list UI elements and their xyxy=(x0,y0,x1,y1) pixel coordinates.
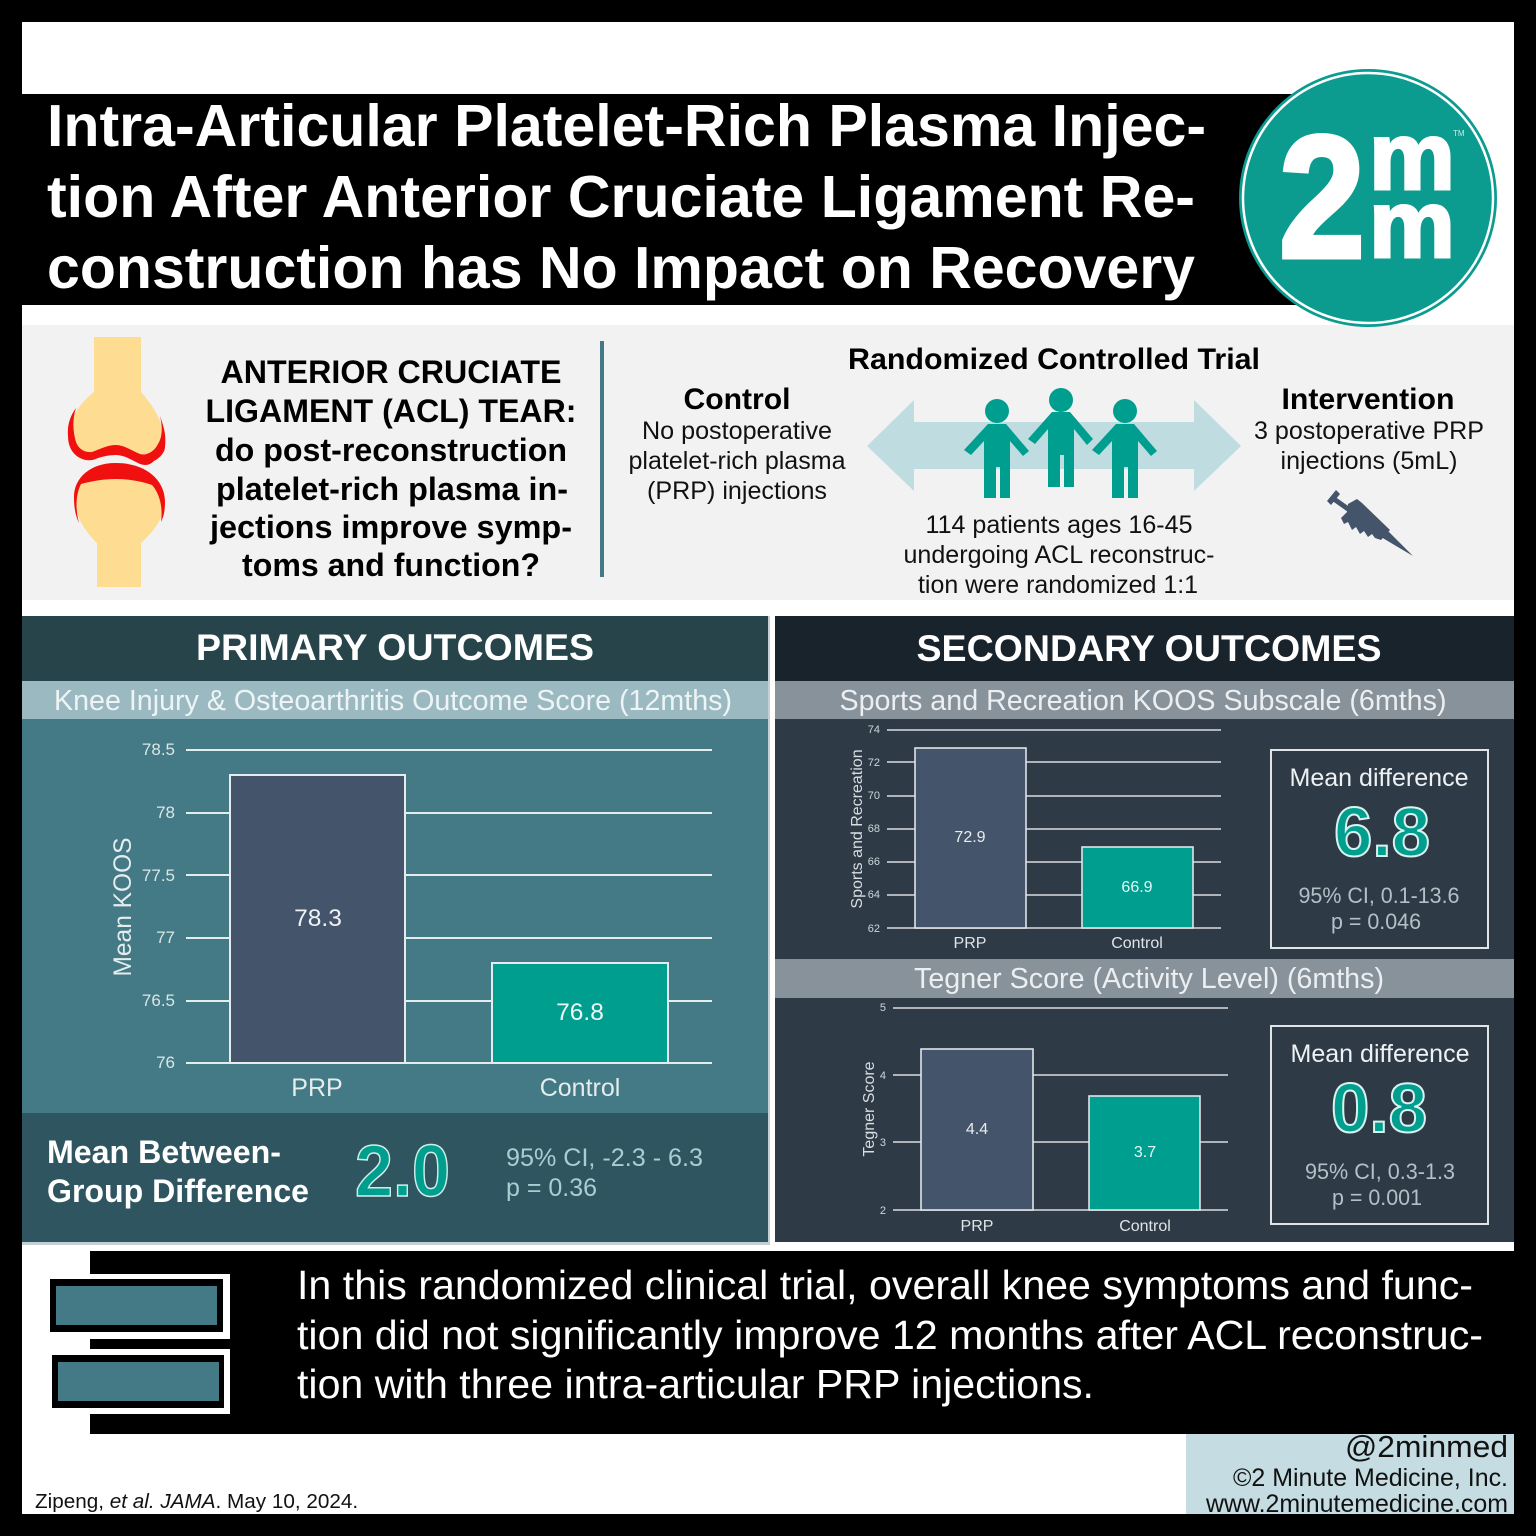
logo: 2 Minute Medicine xyxy=(1239,69,1497,327)
title banner xyxy=(22,93,1312,305)
bar chart: Tegner score: Tegner Score xyxy=(861,1061,878,1157)
bar chart: mean KOOS: 78.3 xyxy=(294,905,342,932)
heading: secondary outcomes: SECONDARY OUTCOMES xyxy=(916,628,1382,669)
logo: 2 Minute Medicine: m xyxy=(1369,171,1455,278)
bar chart: mean KOOS: PRP xyxy=(291,1074,343,1102)
callout: mean between-group difference: Group Difference xyxy=(47,1173,309,1209)
text: clinical question xyxy=(206,354,576,583)
title banner: construction has No Impact on Recovery xyxy=(47,235,1195,301)
subheading: Tegner score xyxy=(775,959,1514,998)
bar chart: Tegner score: PRP xyxy=(961,1218,993,1235)
panel: secondary outcomes xyxy=(775,616,1514,1242)
text: conclusion: In this randomized clinical trial, overall knee symptoms and func- xyxy=(297,1262,1473,1308)
arrow: two-way randomization xyxy=(867,400,1241,491)
callout: Tegner mean difference: 95% CI, 0.3-1.3 xyxy=(1305,1159,1455,1184)
callout: mean between-group difference: 95% CI, -2.3 - 6.3 xyxy=(506,1144,703,1172)
text: patient population: 114 patients ages 16-45 xyxy=(926,511,1192,539)
text: conclusion xyxy=(297,1262,1483,1407)
heading: primary outcomes xyxy=(22,616,768,681)
text: intervention arm: injections (5mL) xyxy=(1280,447,1458,475)
text: clinical question: do post-reconstruction xyxy=(215,432,567,468)
text: intervention arm: Intervention xyxy=(1282,383,1454,416)
bar chart: sports and recreation: Sports and Recreation xyxy=(849,749,866,909)
bar chart: sports and recreation: 68 xyxy=(868,823,880,835)
callout: Tegner mean difference: 0.8 xyxy=(1331,1069,1427,1147)
logo: 2 Minute Medicine: m xyxy=(1369,103,1455,210)
text: intervention arm xyxy=(1254,383,1484,475)
bar chart: Tegner score: 5 xyxy=(880,1002,886,1014)
callout: sports mean difference: p = 0.046 xyxy=(1331,909,1421,934)
panel: credits: www.2minutemedicine.com xyxy=(1205,1490,1508,1518)
callout: mean between-group difference xyxy=(22,1113,768,1242)
bar chart: mean KOOS: 76 xyxy=(156,1053,175,1072)
callout: sports mean difference: 95% CI, 0.1-13.6 xyxy=(1298,883,1460,908)
callout: mean between-group difference: Mean Between- xyxy=(47,1134,281,1170)
bar chart: Tegner score: 3.7 xyxy=(1134,1144,1156,1161)
panel: credits: ©2 Minute Medicine, Inc. xyxy=(1233,1464,1508,1492)
bar chart: sports and recreation: PRP xyxy=(954,935,986,952)
text: clinical question: jections improve symp- xyxy=(209,509,572,545)
callout: Tegner mean difference: p = 0.001 xyxy=(1332,1185,1422,1210)
text: clinical question: ANTERIOR CRUCIATE xyxy=(220,354,562,390)
bar chart: sports and recreation xyxy=(849,724,1221,952)
bar chart: sports and recreation: 72.9 xyxy=(954,829,986,846)
text: intervention arm: 3 postoperative PRP xyxy=(1254,417,1484,445)
bar chart: sports and recreation: 74 xyxy=(868,724,880,736)
bar chart: mean KOOS: 77 xyxy=(156,928,175,947)
text: clinical question: toms and function? xyxy=(242,547,540,583)
panel: background and trial design xyxy=(22,325,1514,600)
text: patient population: undergoing ACL reconstruc- xyxy=(904,541,1214,569)
bar chart: sports and recreation: 72 xyxy=(868,757,880,769)
panel: conclusion banner xyxy=(22,1251,1514,1434)
icon: three patients xyxy=(964,388,1157,498)
subheading: Tegner score: Tegner Score (Activity Level) (6mths) xyxy=(914,963,1384,995)
bar chart: Tegner score: 4 xyxy=(880,1070,886,1082)
bar chart: mean KOOS: 76.5 xyxy=(142,991,175,1010)
icon: knee joint xyxy=(68,337,165,587)
logo: 2 Minute Medicine: 2 xyxy=(1279,99,1365,294)
bar chart: Tegner score: Control xyxy=(1119,1218,1171,1235)
callout: Tegner mean difference: Mean difference xyxy=(1290,1040,1470,1068)
callout: mean between-group difference: p = 0.36 xyxy=(506,1174,597,1202)
panel: credits xyxy=(1186,1429,1514,1518)
heading: primary outcomes: PRIMARY OUTCOMES xyxy=(196,627,594,668)
bar chart: sports and recreation: Control xyxy=(1111,935,1163,952)
logo: 2 Minute Medicine: TM xyxy=(1453,129,1465,138)
text: conclusion: tion did not significantly improve 12 months after ACL reconstruc- xyxy=(297,1312,1483,1358)
text: patient population: tion were randomized 1:1 xyxy=(918,571,1198,599)
subheading: sports and recreation: Sports and Recreation KOOS Subscale (6mths) xyxy=(840,685,1446,717)
callout: mean between-group difference: 2.0 xyxy=(355,1131,450,1212)
callout: sports mean difference: Mean difference xyxy=(1290,764,1468,792)
bar chart: Tegner score: 4.4 xyxy=(966,1121,988,1138)
callout: Tegner mean difference xyxy=(1271,1026,1488,1224)
bar chart: sports and recreation: 64 xyxy=(868,889,880,901)
bar chart: sports and recreation: 62 xyxy=(868,923,880,935)
bar chart: mean KOOS: 77.5 xyxy=(142,866,175,885)
text: control arm: Control xyxy=(684,383,790,416)
bar chart: Tegner score: 2 xyxy=(880,1205,886,1217)
panel: primary outcomes xyxy=(22,616,770,1245)
panel: credits: @2minmed xyxy=(1345,1429,1508,1464)
title banner: Intra-Articular Platelet-Rich Plasma Injec- xyxy=(47,93,1206,159)
bar chart: sports and recreation: 66 xyxy=(868,856,880,868)
heading: randomized controlled trial: Randomized Controlled Trial xyxy=(848,343,1260,376)
text: control arm xyxy=(628,383,846,505)
bar chart: sports and recreation: 70 xyxy=(868,790,880,802)
bar chart: mean KOOS: 76.8 xyxy=(556,999,604,1026)
bar chart: mean KOOS: 78 xyxy=(156,803,175,822)
subheading: KOOS: Knee Injury & Osteoarthritis Outcome Score (12mths) xyxy=(54,685,732,717)
bar chart: Tegner score xyxy=(861,1002,1228,1235)
text: control arm: (PRP) injections xyxy=(647,477,827,505)
bar chart: Tegner score: 3 xyxy=(880,1137,886,1149)
icon: syringe xyxy=(1327,490,1413,556)
text: clinical question: LIGAMENT (ACL) TEAR: xyxy=(206,393,576,429)
bar chart: mean KOOS: Control xyxy=(540,1074,620,1102)
callout: sports mean difference xyxy=(1271,750,1488,948)
text: control arm: No postoperative xyxy=(642,417,832,445)
title banner: tion After Anterior Cruciate Ligament Re- xyxy=(47,164,1195,230)
text: conclusion: tion with three intra-articular PRP injections. xyxy=(297,1361,1094,1407)
text: control arm: platelet-rich plasma xyxy=(628,447,846,475)
text: clinical question: platelet-rich plasma in- xyxy=(216,471,568,507)
text: patient population xyxy=(904,511,1214,599)
subheading: sports and recreation xyxy=(775,681,1514,719)
icon: two stacked bars xyxy=(22,1274,230,1414)
bar chart: mean KOOS: 78.5 xyxy=(142,740,175,759)
heading: secondary outcomes xyxy=(775,616,1514,681)
bar chart: mean KOOS xyxy=(109,740,712,1102)
text: citation: Zipeng, et al. JAMA. May 10, 2024. xyxy=(35,1490,358,1513)
callout: sports mean difference: 6.8 xyxy=(1334,793,1430,871)
bar chart: sports and recreation: 66.9 xyxy=(1121,879,1153,896)
bar chart: mean KOOS: Mean KOOS xyxy=(109,838,137,976)
